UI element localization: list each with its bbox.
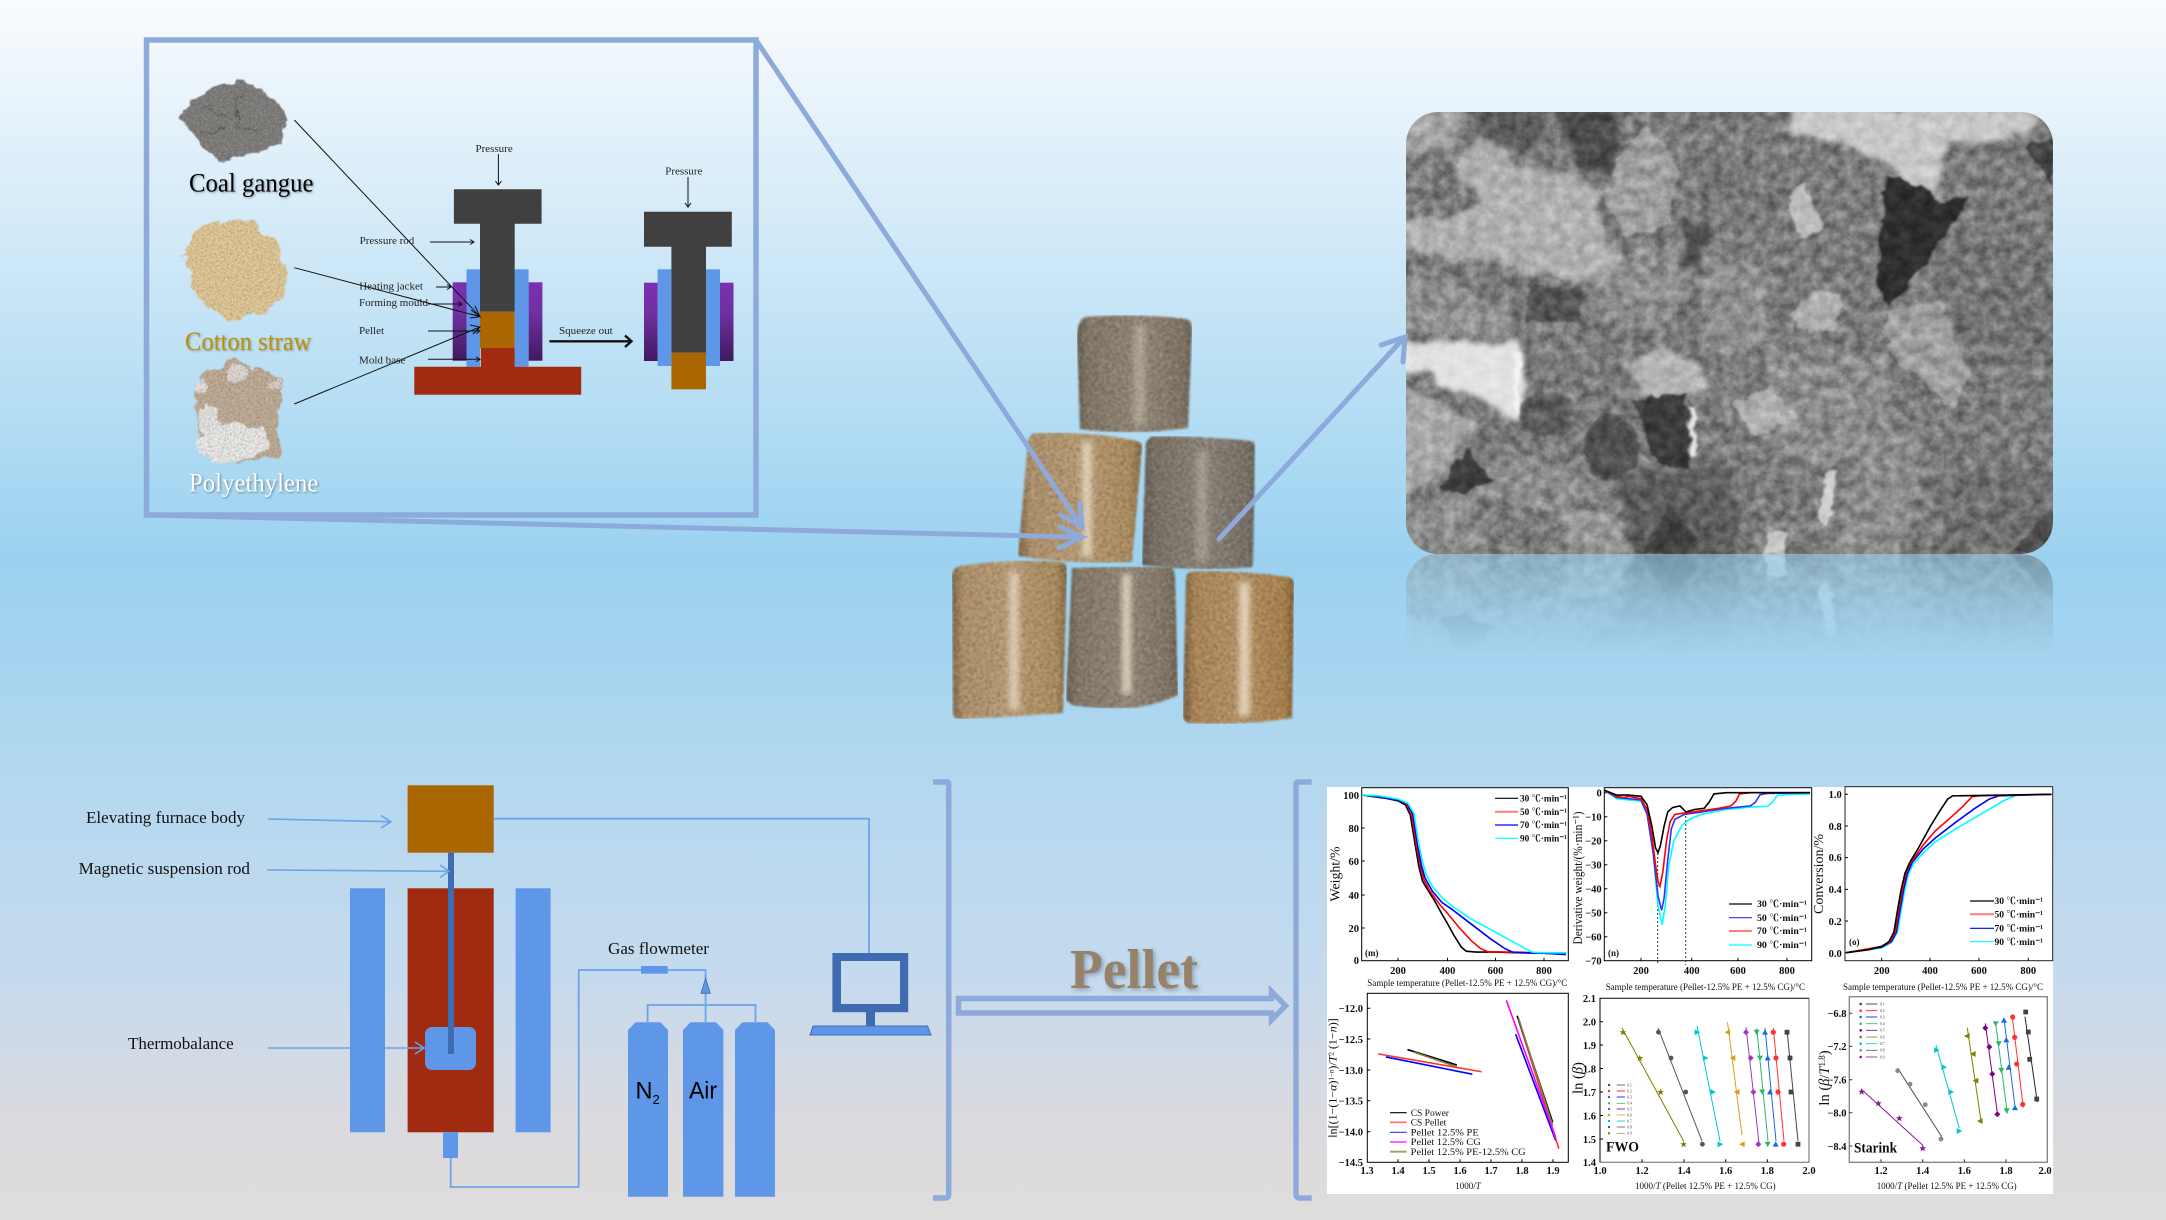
chart o: conversion vs temperature: 0.6	[1829, 853, 1842, 864]
chart q: FWO plot: 1.4	[1677, 1166, 1691, 1177]
chart q: FWO plot: 1.8	[1761, 1166, 1774, 1177]
chart p: kinetic fitting lines: −13.0	[1339, 1066, 1363, 1077]
chart p: kinetic fitting lines: 1−n	[1328, 1070, 1336, 1081]
thermobalance	[425, 1027, 476, 1070]
chart p: kinetic fitting lines	[1326, 993, 1568, 1191]
chart n: derivative weight vs temperature: 0	[1596, 788, 1602, 800]
chart p: kinetic fitting lines: −13.5	[1339, 1096, 1363, 1108]
pellet bottom middle	[1066, 567, 1178, 708]
chart q: FWO plot: 2.0	[1802, 1166, 1816, 1177]
diagram labels: Heating jacket	[359, 280, 423, 292]
bracket: left	[933, 782, 949, 1198]
chart n: derivative weight vs temperature: −20	[1585, 836, 1602, 848]
chart r: Starink plot: 0.9	[1880, 1055, 1885, 1059]
chart q: FWO plot: 1.7	[1583, 1088, 1596, 1099]
chart o: conversion vs temperature: 800	[2020, 966, 2036, 977]
chart q: FWO plot: 1000/T (Pellet 12.5% PE + 12.5% CG)	[1635, 1181, 1776, 1191]
chart n: derivative weight vs temperature: 400	[1684, 966, 1700, 977]
diagram labels: Forming mould	[359, 297, 428, 309]
chart n: derivative weight vs temperature: −50	[1585, 908, 1602, 920]
chart p: kinetic fitting lines: −12.5	[1339, 1035, 1363, 1046]
pellet highlights	[1009, 325, 1250, 716]
chart m: weight vs temperature: 600	[1488, 966, 1503, 977]
chart m: weight vs temperature: 800	[1536, 966, 1552, 977]
chart q: FWO plot: 1.5	[1583, 1135, 1596, 1146]
label: Pellet: Pellet	[1070, 939, 1198, 1001]
chart p: kinetic fitting lines: −12.0	[1339, 1004, 1363, 1015]
SEM reflection	[1406, 554, 2053, 644]
suspension rod	[448, 853, 454, 1054]
diagram labels: Pressure	[665, 166, 703, 178]
diagram labels: Pressure rod	[360, 235, 415, 247]
gas flowmeter	[641, 966, 668, 974]
chart q: FWO plot: 1.4	[1583, 1158, 1597, 1169]
diagram labels: Squeeze out	[559, 325, 613, 337]
chart q: FWO plot: ln (β)	[1570, 1062, 1586, 1094]
arrow: hollow arrow to charts	[958, 992, 1286, 1020]
chart o: conversion vs temperature: 400	[1922, 966, 1938, 977]
panel: charts	[1326, 787, 2053, 1194]
chart r: Starink plot: 0.2	[1880, 1009, 1885, 1013]
left heater bar	[350, 888, 385, 1132]
chart n: derivative weight vs temperature: −30	[1585, 860, 1602, 872]
chart n: derivative weight vs temperature: 90 ℃·min⁻¹	[1757, 940, 1807, 951]
label: coal gangue: Coal gangue	[189, 169, 314, 198]
pellet top	[1077, 315, 1192, 432]
chart m: weight vs temperature: (m)	[1365, 948, 1378, 958]
chart p: kinetic fitting lines: −14.5	[1339, 1158, 1363, 1169]
chart p: kinetic fitting lines: 1.6	[1453, 1166, 1467, 1177]
label: polyethylene: Polyethylene	[189, 469, 318, 498]
chart m: weight vs temperature: 20	[1348, 924, 1359, 935]
nitrogen cylinder: N	[636, 1078, 652, 1104]
right heater bar	[516, 888, 551, 1132]
chart n: derivative weight vs temperature: Sample temperature (Pellet-12.5% PE + 12.5% CG)/°C	[1606, 982, 1805, 992]
chart p: kinetic fitting lines: T	[1326, 1054, 1340, 1062]
furnace chamber	[408, 888, 494, 1132]
chart p: kinetic fitting lines: )/	[1326, 1062, 1340, 1070]
chart n: derivative weight vs temperature: Derivative weight/(%·min⁻¹)	[1570, 812, 1585, 944]
chart m: weight vs temperature: 0	[1354, 956, 1359, 967]
chart m: weight vs temperature: Sample temperature (Pellet-12.5% PE + 12.5% CG)/°C	[1367, 978, 1567, 988]
diagram labels: Mold base	[359, 354, 405, 366]
computer	[810, 953, 931, 1035]
panel: pellet stack photo	[952, 315, 1294, 724]
chart r: Starink plot: 0.1	[1880, 1002, 1885, 1006]
chart n: derivative weight vs temperature: 200	[1633, 966, 1649, 977]
chart m: weight vs temperature: 70 ℃·min⁻¹	[1520, 820, 1567, 831]
chart m: weight vs temperature	[1328, 788, 1568, 988]
flow arrow	[701, 978, 710, 993]
chart r: Starink plot: −6.8	[1827, 1009, 1846, 1020]
panel: raw materials and moulding diagram	[146, 40, 756, 515]
chart p: kinetic fitting lines: 1.9	[1546, 1166, 1560, 1177]
bracket: right	[1296, 782, 1312, 1198]
chart n: derivative weight vs temperature: −70	[1585, 956, 1602, 968]
chart q: FWO plot: 0.1	[1627, 1083, 1632, 1087]
chart q: FWO plot: 0.5	[1627, 1107, 1632, 1111]
chart q: FWO plot: 0.6	[1627, 1113, 1632, 1117]
chart o: conversion vs temperature: 90 ℃·min⁻¹	[1994, 937, 2043, 948]
apparatus labels: Elevating furnace body	[86, 808, 245, 827]
chart r: Starink plot: 1000/T (Pellet 12.5% PE + 12.5% CG)	[1877, 1181, 2017, 1191]
chart m: weight vs temperature: 80	[1348, 824, 1359, 835]
panel frame	[146, 40, 756, 515]
diagram labels: Pressure	[476, 143, 513, 155]
arrows: zoom lines from panel to pellets and to SEM	[146, 40, 1405, 548]
chart r: Starink plot: 1.6	[1958, 1166, 1971, 1177]
chart q: FWO plot: 1.0	[1593, 1166, 1607, 1177]
chart q: FWO plot: 0.7	[1627, 1119, 1632, 1123]
chart r: Starink plot: 0.5	[1880, 1029, 1885, 1033]
chart r: Starink plot: 1.8	[1999, 1166, 2013, 1177]
pellet middle left	[1018, 433, 1142, 563]
chart r: Starink plot: 1.8	[1817, 1055, 1827, 1067]
chart r: Starink plot: 0.3	[1880, 1015, 1885, 1019]
chart r: Starink plot: −7.6	[1827, 1076, 1846, 1086]
chart q: FWO plot: 1.9	[1583, 1041, 1596, 1052]
chart o: conversion vs temperature: 0.8	[1829, 822, 1842, 833]
chart q: FWO plot: 0.8	[1627, 1125, 1632, 1129]
chart q: FWO plot	[1570, 994, 1816, 1191]
chart p: kinetic fitting lines: Pellet 12.5% CG	[1411, 1138, 1481, 1148]
air cylinder: Air	[689, 1078, 717, 1104]
chart q: FWO plot: 1.6	[1583, 1112, 1596, 1122]
chart r: Starink plot: −7.2	[1827, 1042, 1846, 1053]
chart r: Starink plot: −8.0	[1827, 1108, 1846, 1120]
pellet bottom left	[952, 561, 1067, 719]
chart m: weight vs temperature: 100	[1343, 791, 1359, 802]
chart r: Starink plot: )	[1817, 1050, 1833, 1055]
pellet middle right	[1142, 436, 1255, 569]
chart q: FWO plot: 2.1	[1583, 994, 1596, 1005]
image: cotton straw	[185, 220, 289, 322]
chart r: Starink plot: 1.2	[1874, 1166, 1888, 1177]
chart r: Starink plot: 0.8	[1880, 1049, 1885, 1053]
chart n: derivative weight vs temperature: 600	[1730, 966, 1746, 977]
chart p: kinetic fitting lines: 1.3	[1360, 1166, 1374, 1177]
chart m: weight vs temperature: 30 ℃·min⁻¹	[1520, 794, 1567, 804]
chart o: conversion vs temperature: 30 ℃·min⁻¹	[1994, 896, 2043, 907]
chart q: FWO plot: 2.0	[1583, 1018, 1596, 1028]
chart o: conversion vs temperature: (o)	[1849, 937, 1860, 947]
chart o: conversion vs temperature: 200	[1874, 966, 1890, 977]
chart q: FWO plot: 1.8	[1583, 1064, 1596, 1076]
chart q: FWO plot: 0.3	[1627, 1095, 1632, 1099]
chart r: Starink plot: ln (β/T	[1817, 1067, 1833, 1106]
chart n: derivative weight vs temperature: 800	[1779, 966, 1795, 977]
chart q: FWO plot: 0.2	[1627, 1089, 1632, 1093]
chart n: derivative weight vs temperature: −60	[1585, 932, 1602, 944]
chart p: kinetic fitting lines: 2	[1328, 1052, 1336, 1056]
third cylinder	[735, 1022, 775, 1197]
chart n: derivative weight vs temperature	[1570, 788, 1812, 992]
chart p: kinetic fitting lines: Pellet 12.5% PE-12.5% CG	[1411, 1148, 1526, 1158]
apparatus label arrows	[267, 816, 449, 1054]
chart m: weight vs temperature: 40	[1348, 891, 1359, 902]
chart p: kinetic fitting lines: −14.0	[1339, 1128, 1363, 1138]
chart p: kinetic fitting lines: 1000/T	[1455, 1181, 1482, 1191]
apparatus labels	[79, 808, 709, 1053]
chart m: weight vs temperature: 200	[1390, 966, 1406, 977]
air cylinder	[683, 1022, 723, 1197]
chart p: kinetic fitting lines: ln[(1−(1−α)	[1326, 1081, 1340, 1138]
chart m: weight vs temperature: 90 ℃·min⁻¹	[1520, 834, 1567, 844]
nitrogen cylinder: 2	[652, 1092, 660, 1107]
chart r: Starink plot	[1817, 997, 2052, 1191]
chart r: Starink plot: 1.4	[1916, 1166, 1930, 1177]
chart o: conversion vs temperature: 70 ℃·min⁻¹	[1994, 924, 2043, 934]
diagram arrows	[294, 120, 691, 404]
chart r: Starink plot: Starink	[1854, 1141, 1898, 1157]
chart panel background	[1327, 787, 2053, 1194]
chart o: conversion vs temperature: 600	[1971, 966, 1987, 977]
chart m: weight vs temperature: Weight/%	[1328, 846, 1344, 902]
chart q: FWO plot: 0.9	[1627, 1132, 1632, 1136]
apparatus labels: Thermobalance	[128, 1034, 234, 1053]
elevating furnace body	[408, 785, 494, 853]
chart n: derivative weight vs temperature: 50 ℃·min⁻¹	[1757, 913, 1807, 924]
diagram labels: Pellet	[359, 325, 384, 337]
chart r: Starink plot: 2.0	[2038, 1166, 2052, 1177]
chart m: weight vs temperature: 400	[1440, 966, 1455, 977]
chart r: Starink plot: 0.6	[1880, 1035, 1885, 1039]
chart m: weight vs temperature: 50 ℃·min⁻¹	[1520, 807, 1567, 818]
chart r: Starink plot: −8.4	[1827, 1142, 1847, 1153]
chart p: kinetic fitting lines: 1.4	[1391, 1166, 1405, 1177]
diagram labels	[359, 143, 703, 366]
chart q: FWO plot: 1.2	[1635, 1166, 1649, 1177]
chart p: kinetic fitting lines: Pellet 12.5% PE	[1411, 1128, 1479, 1138]
chart p: kinetic fitting lines: 1.7	[1484, 1166, 1498, 1177]
chart n: derivative weight vs temperature: 30 ℃·min⁻¹	[1757, 899, 1807, 910]
chart o: conversion vs temperature: 50 ℃·min⁻¹	[1994, 910, 2043, 920]
pellet bottom right	[1183, 571, 1294, 724]
chart o: conversion vs temperature: 0.4	[1829, 885, 1842, 896]
chart p: kinetic fitting lines: (1−	[1326, 1032, 1340, 1052]
chart p: kinetic fitting lines: CS Power	[1411, 1109, 1450, 1119]
chart n: derivative weight vs temperature: 70 ℃·min⁻¹	[1757, 926, 1807, 937]
second press: squeeze out assembly	[644, 212, 734, 389]
chart q: FWO plot: 0.4	[1627, 1102, 1632, 1106]
chart n: derivative weight vs temperature: −10	[1585, 812, 1602, 824]
chart q: FWO plot: FWO	[1606, 1140, 1639, 1156]
nitrogen cylinder	[628, 1022, 668, 1197]
chart o: conversion vs temperature: 0.0	[1829, 949, 1842, 960]
chart q: FWO plot: 1.6	[1719, 1166, 1732, 1177]
chart o: conversion vs temperature: Sample temperature (Pellet-12.5% PE + 12.5% CG)/°C	[1843, 982, 2043, 992]
bottom stub	[443, 1132, 458, 1158]
panel: SEM micrograph	[1406, 112, 2053, 644]
chart n: derivative weight vs temperature: −40	[1585, 884, 1602, 896]
chart o: conversion vs temperature: 0.2	[1829, 917, 1842, 928]
chart n: derivative weight vs temperature: (n)	[1608, 948, 1619, 958]
gas pipework	[451, 819, 869, 1187]
chart r: Starink plot: 0.7	[1880, 1042, 1885, 1046]
chart o: conversion vs temperature: Conversion/%	[1812, 834, 1827, 914]
label: cotton straw: Cotton straw	[185, 327, 312, 356]
chart r: Starink plot: 0.4	[1880, 1022, 1885, 1026]
apparatus labels: Gas flowmeter	[608, 939, 709, 958]
first press: pressure rod assembly	[414, 189, 581, 395]
chart o: conversion vs temperature: 1.0	[1829, 790, 1842, 801]
chart m: weight vs temperature: 60	[1348, 857, 1359, 868]
panel: thermogravimetric apparatus	[79, 785, 931, 1197]
chart p: kinetic fitting lines: 1.5	[1422, 1166, 1436, 1177]
apparatus labels: Magnetic suspension rod	[79, 859, 250, 878]
chart p: kinetic fitting lines: CS Pellet	[1411, 1118, 1447, 1128]
chart o: conversion vs temperature	[1812, 787, 2053, 992]
chart p: kinetic fitting lines: 1.8	[1515, 1166, 1529, 1177]
image: polyethylene	[195, 358, 281, 463]
image: coal gangue	[182, 82, 287, 161]
chart p: kinetic fitting lines: n)]	[1326, 1018, 1340, 1032]
